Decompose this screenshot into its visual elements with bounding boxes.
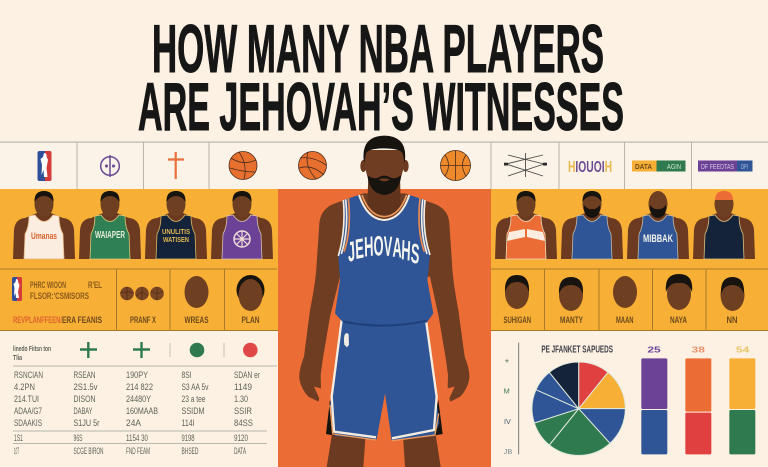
info text block: FLSOR:'CSMISORS (30, 291, 89, 301)
shorts (330, 318, 439, 441)
table rows: DABAY (74, 406, 92, 416)
table header label: Tlia (13, 355, 22, 362)
table rows: S1JU 5r (74, 418, 100, 428)
portrait: Nn: NN (726, 315, 738, 326)
cell: bald face: WREAS (184, 315, 208, 326)
title (138, 11, 624, 145)
player: navy jersey with orange cap (693, 191, 755, 259)
pie and bar chart panel (504, 343, 755, 456)
arms and torso (299, 193, 469, 402)
table rows: 23 a tee (182, 394, 206, 404)
table rows: SSIDM (182, 406, 204, 416)
portrait: Manty: MANTY (560, 315, 583, 326)
icon: cross (168, 152, 184, 179)
player: white jersey (13, 191, 75, 259)
player: orange jersey (495, 191, 557, 259)
table rows: SDAN er (234, 370, 260, 380)
portrait: Naya: NAYA (670, 315, 687, 326)
bar: purple and blue (641, 344, 667, 454)
player: navy jersey: WATISEN (163, 237, 189, 244)
icon: colored word: HIOUOIH (568, 159, 612, 176)
icon: yellow and green label: AGIN (667, 162, 681, 171)
player: blue lettered jersey (627, 191, 689, 259)
table rows: 190PY (126, 370, 148, 380)
table rows: 9198 (182, 433, 194, 443)
portrait: Naya (666, 274, 692, 326)
portrait: Manty (559, 277, 583, 326)
bar: yellow and green (729, 344, 755, 454)
table rows: 214.TUI (14, 394, 39, 404)
info text block: ERA FEANIS (62, 315, 102, 326)
icon: basketball center right (440, 150, 470, 180)
neck (367, 173, 401, 222)
portrait: Man (613, 276, 637, 326)
table rows: 8SI (182, 370, 192, 380)
cell: face with hair (236, 275, 264, 326)
cell: bald face (184, 276, 208, 326)
cell: three balls (120, 287, 164, 326)
NBA mini logo (12, 277, 22, 301)
icon: yellow and green label: DATA (635, 162, 653, 171)
jersey (335, 195, 433, 326)
table rows: 114I (182, 418, 194, 428)
table rows: S3 AA 5v (182, 382, 209, 392)
player: green jersey (79, 191, 141, 259)
icon: basketball center left (298, 152, 326, 180)
table rows: DISON (74, 394, 96, 404)
table rows: 9120 (234, 433, 248, 443)
panel: left players (0, 189, 278, 331)
panel: right players (491, 189, 768, 331)
jersey lettering: JEHOVAHS (347, 230, 420, 271)
table rows: 2S1.5v (74, 382, 98, 392)
portrait: Man: MAAN (616, 315, 634, 326)
info text block (13, 280, 102, 326)
portrait: Suhigan (504, 275, 531, 326)
icon: purple and blue label: DPI (741, 164, 748, 171)
chart axis: JB (504, 447, 512, 456)
icon: purple and blue label: DF FEEDTAS (701, 164, 734, 171)
icon: basketball left (229, 152, 257, 180)
table rows: 1149 (234, 382, 252, 392)
chart axis: M (504, 386, 510, 395)
portrait: Suhigan: SUHIGAN (504, 315, 531, 326)
table header label (13, 346, 51, 362)
legs (327, 430, 441, 467)
icon: crossed lines (504, 153, 547, 177)
icon: circle symbol (101, 155, 119, 177)
table rows (14, 370, 260, 456)
icon: yellow and green label (632, 160, 686, 172)
head (360, 136, 409, 195)
table rows: DATA (234, 446, 246, 456)
table rows: BHSED (182, 446, 199, 456)
table rows: 24A (126, 418, 141, 428)
player: blue jersey with beard (561, 191, 623, 259)
pie chart (532, 362, 625, 455)
bar: orange and red: 38 (692, 344, 705, 354)
player: navy jersey: UNULITIS (162, 229, 190, 236)
table rows: 24480Y (126, 394, 151, 404)
chart axis (504, 343, 519, 456)
portrait: Nn (720, 277, 744, 326)
icon: red dot (243, 343, 258, 357)
table rows: 84SS (234, 418, 253, 428)
table rows: 160MAAB (126, 406, 158, 416)
cell: three balls: PRANF X (130, 315, 156, 326)
icon: purple and blue label (698, 160, 752, 172)
info text block: REVPLANFFEEN/ (13, 315, 62, 326)
bar: yellow and green: 54 (736, 344, 750, 354)
icon: green plus one (80, 342, 97, 358)
table rows: 96S (74, 433, 82, 443)
player: green jersey: WAIAPER (95, 230, 125, 241)
player: white jersey: Umanas (31, 231, 57, 241)
bar: orange and red (685, 344, 711, 454)
icon: green dot (190, 343, 204, 357)
table rows: SCGE BIRON (74, 446, 104, 456)
table rows: ADAA/G7 (14, 406, 42, 416)
icon: NBA logo (38, 151, 52, 181)
table rows: RSEAN (74, 370, 96, 380)
info text block: PHRC WIOON (30, 280, 66, 290)
table rows: 1.30 (234, 394, 248, 404)
cell: face with hair: PLAN (242, 315, 260, 326)
player: purple jersey (211, 191, 273, 259)
panel: center orange (278, 189, 491, 467)
table rows: RSNCIAN (14, 370, 43, 380)
chart axis: + (505, 356, 510, 365)
chart axis: IV (504, 417, 511, 426)
table rows: SSIR (234, 406, 252, 416)
chart title: PE JFANKET SAPUEDS (541, 345, 613, 356)
icon: green plus two (133, 342, 150, 358)
table rows: 1154 30 (126, 433, 148, 443)
table rows: 10T (14, 446, 19, 456)
table rows: SDAAKIS (14, 418, 42, 428)
info text block: R'EL (88, 280, 102, 290)
player: blue lettered jersey: MIBBAK (643, 233, 673, 245)
table (13, 342, 277, 456)
central player figure (299, 136, 469, 467)
table rows: 214 822 (126, 382, 153, 392)
icon strip (0, 142, 768, 189)
table header label: linedo Fiitsn ton (13, 346, 51, 353)
black short lining (326, 400, 443, 437)
bar: purple and blue: 25 (647, 344, 661, 354)
player: navy jersey (145, 191, 207, 259)
table rows: FND FEAM (126, 446, 150, 456)
table rows: 1S1 (14, 433, 23, 443)
table rows: 4.2PN (14, 382, 35, 392)
